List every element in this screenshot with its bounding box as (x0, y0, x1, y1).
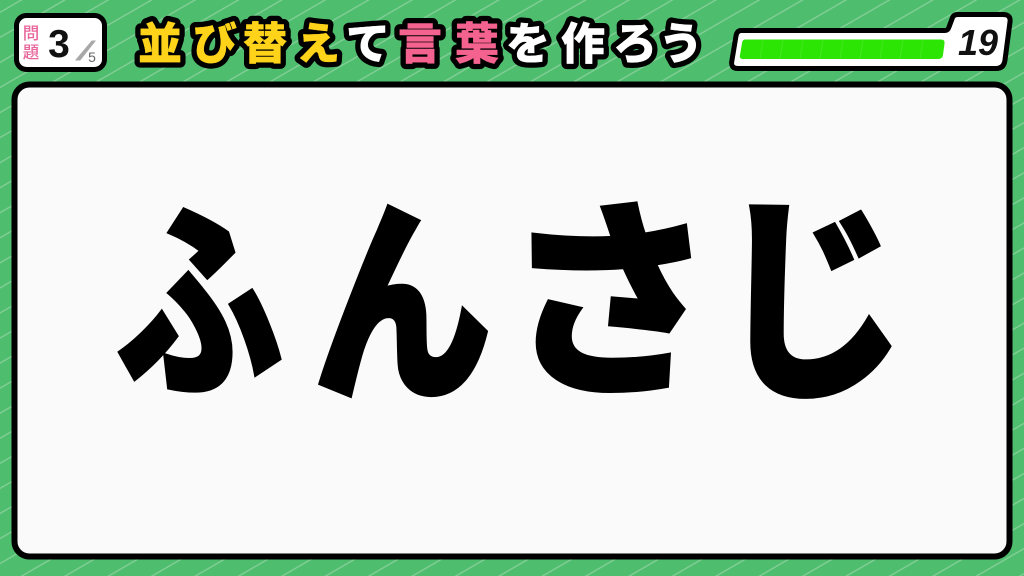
title outline: 並 (138, 20, 182, 69)
timer number: 19 (958, 22, 998, 63)
label: mondai: 題 (23, 43, 40, 62)
title outline: を (506, 20, 550, 69)
question badge (16, 16, 104, 70)
title fill: び (193, 20, 237, 69)
title fill: て (346, 20, 390, 69)
scrambled letters: ふ (116, 190, 284, 424)
title outline: 作 (561, 20, 605, 69)
title outline: 替 (243, 20, 287, 69)
timer frame (732, 14, 1010, 68)
timer (732, 14, 1010, 68)
scrambled letters: さ (505, 188, 715, 422)
scrambled letters (116, 184, 907, 430)
total: 5 (88, 49, 96, 65)
title fill: を (506, 20, 550, 69)
title fill: う (659, 20, 703, 69)
slash (76, 41, 95, 60)
question number: 3 (48, 23, 70, 66)
title fill: 替 (243, 20, 287, 69)
title fill: 作 (561, 20, 605, 69)
title fill: ろ (613, 20, 657, 69)
title outline: え (296, 20, 340, 69)
title fill: え (296, 20, 340, 69)
title outline: 言 (398, 20, 442, 69)
timer bar (740, 40, 945, 59)
title fill (138, 20, 703, 69)
title outline: う (659, 20, 703, 69)
title outline: び (193, 20, 237, 69)
title (138, 20, 703, 69)
title fill: 言 (398, 20, 442, 69)
title outline: て (346, 20, 390, 69)
main panel (14, 84, 1010, 556)
title fill: 並 (138, 20, 182, 69)
scrambled letters: ん (312, 187, 492, 430)
title outline: ろ (613, 20, 657, 69)
title outline: 葉 (455, 20, 499, 69)
label: mondai: 問 (23, 25, 39, 43)
label: mondai (23, 25, 40, 62)
scrambled letters: じ (717, 184, 907, 427)
title fill: 葉 (455, 20, 499, 69)
title outline (138, 20, 703, 69)
